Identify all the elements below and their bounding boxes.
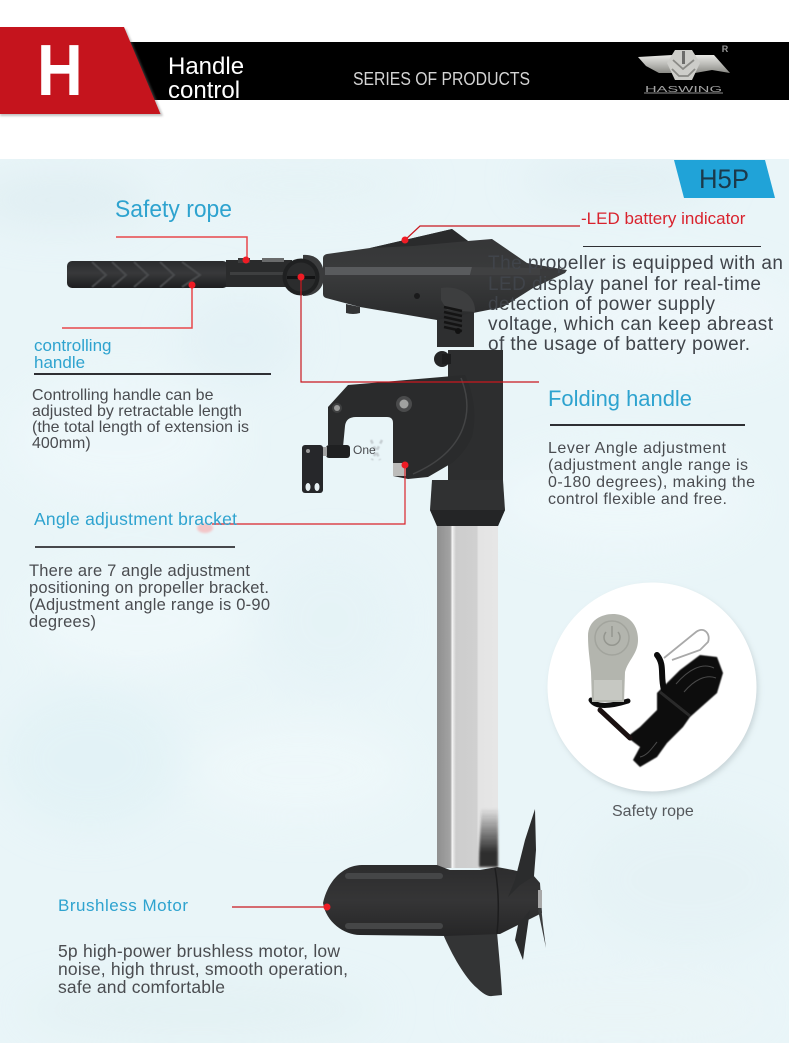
trolling motor product — [67, 229, 567, 996]
handle grip — [67, 261, 228, 288]
controlling handle block — [32, 336, 271, 452]
folding handle description: Lever Angle adjustment — [548, 440, 727, 457]
one label with ghost mark — [353, 440, 382, 460]
controlling handle description: adjusted by retractable length — [32, 403, 242, 420]
tilt stem — [437, 290, 474, 347]
clamp screw and plate — [302, 445, 350, 493]
brand logo — [638, 44, 730, 94]
folding handle description: (adjustment angle range is — [548, 457, 748, 474]
angle bracket heading: Angle adjustment bracket — [34, 509, 237, 529]
shaft collar — [430, 480, 505, 526]
tilt lever knob and spring — [441, 288, 475, 334]
brushless motor description: 5p high-power brushless motor, low — [58, 941, 340, 961]
carabiner — [664, 630, 709, 660]
angle bracket description — [29, 562, 270, 631]
brushless motor heading: Brushless Motor — [58, 896, 188, 915]
LED indicator description: detection of power supply — [488, 294, 716, 315]
header title — [168, 53, 244, 104]
folding handle description: control flexible and free. — [548, 491, 727, 508]
folding handle heading: Folding handle — [548, 386, 692, 411]
callout leader: controlling handle — [62, 282, 196, 328]
controlling handle description: Controlling handle can be — [32, 387, 214, 404]
folding handle description: 0-180 degrees), making the — [548, 474, 755, 491]
H5P model tag: H5P — [699, 164, 749, 194]
LED indicator description: The propeller is equipped with an — [488, 253, 783, 274]
LED indicator description: voltage, which can keep abreast — [488, 314, 774, 335]
lower motor body — [323, 809, 546, 996]
LED indicator description: LED display panel for real-time — [488, 274, 761, 295]
folding knuckle — [282, 255, 324, 296]
callout leader: angle bracket — [197, 462, 408, 533]
brushless motor description: safe and comfortable — [58, 977, 225, 997]
red H badge: H — [37, 31, 83, 111]
brand logo: HASWING — [645, 84, 722, 94]
red H badge — [0, 27, 163, 116]
motor head — [323, 229, 567, 320]
controlling handle description: (the total length of extension is — [32, 419, 249, 436]
angle bracket block — [29, 509, 270, 631]
callout leader: LED indicator — [402, 226, 580, 244]
LED indicator description: of the usage of battery power. — [488, 334, 750, 355]
black title band — [110, 42, 789, 100]
controlling handle heading: handle — [34, 353, 85, 372]
safety rope caption: Safety rope — [612, 803, 694, 820]
folding handle description — [548, 440, 755, 508]
callout leader: folding handle — [298, 274, 539, 382]
callout leader: brushless motor — [232, 904, 330, 910]
angle bracket description: (Adjustment angle range is 0-90 — [29, 596, 270, 614]
safety switch fob — [588, 614, 638, 702]
handle collar — [226, 258, 292, 287]
rope coil — [591, 655, 723, 767]
mount block — [434, 350, 503, 480]
controlling handle description: 400mm) — [32, 435, 91, 452]
angle bracket description: degrees) — [29, 613, 96, 631]
header banner — [0, 27, 789, 116]
header title: control — [168, 77, 240, 104]
controlling handle heading — [34, 336, 112, 372]
brushless motor block — [58, 896, 348, 997]
safety rope heading: Safety rope — [115, 196, 232, 223]
brushless motor description: noise, high thrust, smooth operation, — [58, 959, 348, 979]
series of products label: SERIES OF PRODUCTS — [353, 69, 530, 89]
callout leader: safety rope — [116, 237, 250, 264]
safety rope photo circle — [548, 582, 758, 794]
one label with ghost mark: One — [353, 443, 376, 457]
bracket plate — [328, 375, 474, 479]
aluminium shaft — [437, 520, 498, 868]
brand logo: R — [722, 44, 729, 54]
controlling handle heading: controlling — [34, 336, 112, 355]
brushless motor description — [58, 941, 348, 997]
LED indicator block — [488, 209, 783, 355]
H5P model tag — [674, 160, 775, 198]
controlling handle description — [32, 387, 249, 452]
angle bracket description: There are 7 angle adjustment — [29, 562, 250, 580]
header title: Handle — [168, 53, 244, 80]
folding handle block — [548, 386, 755, 508]
LED indicator heading: -LED battery indicator — [581, 209, 746, 228]
angle bracket description: positioning on propeller bracket. — [29, 579, 269, 597]
LED indicator description — [488, 253, 783, 355]
